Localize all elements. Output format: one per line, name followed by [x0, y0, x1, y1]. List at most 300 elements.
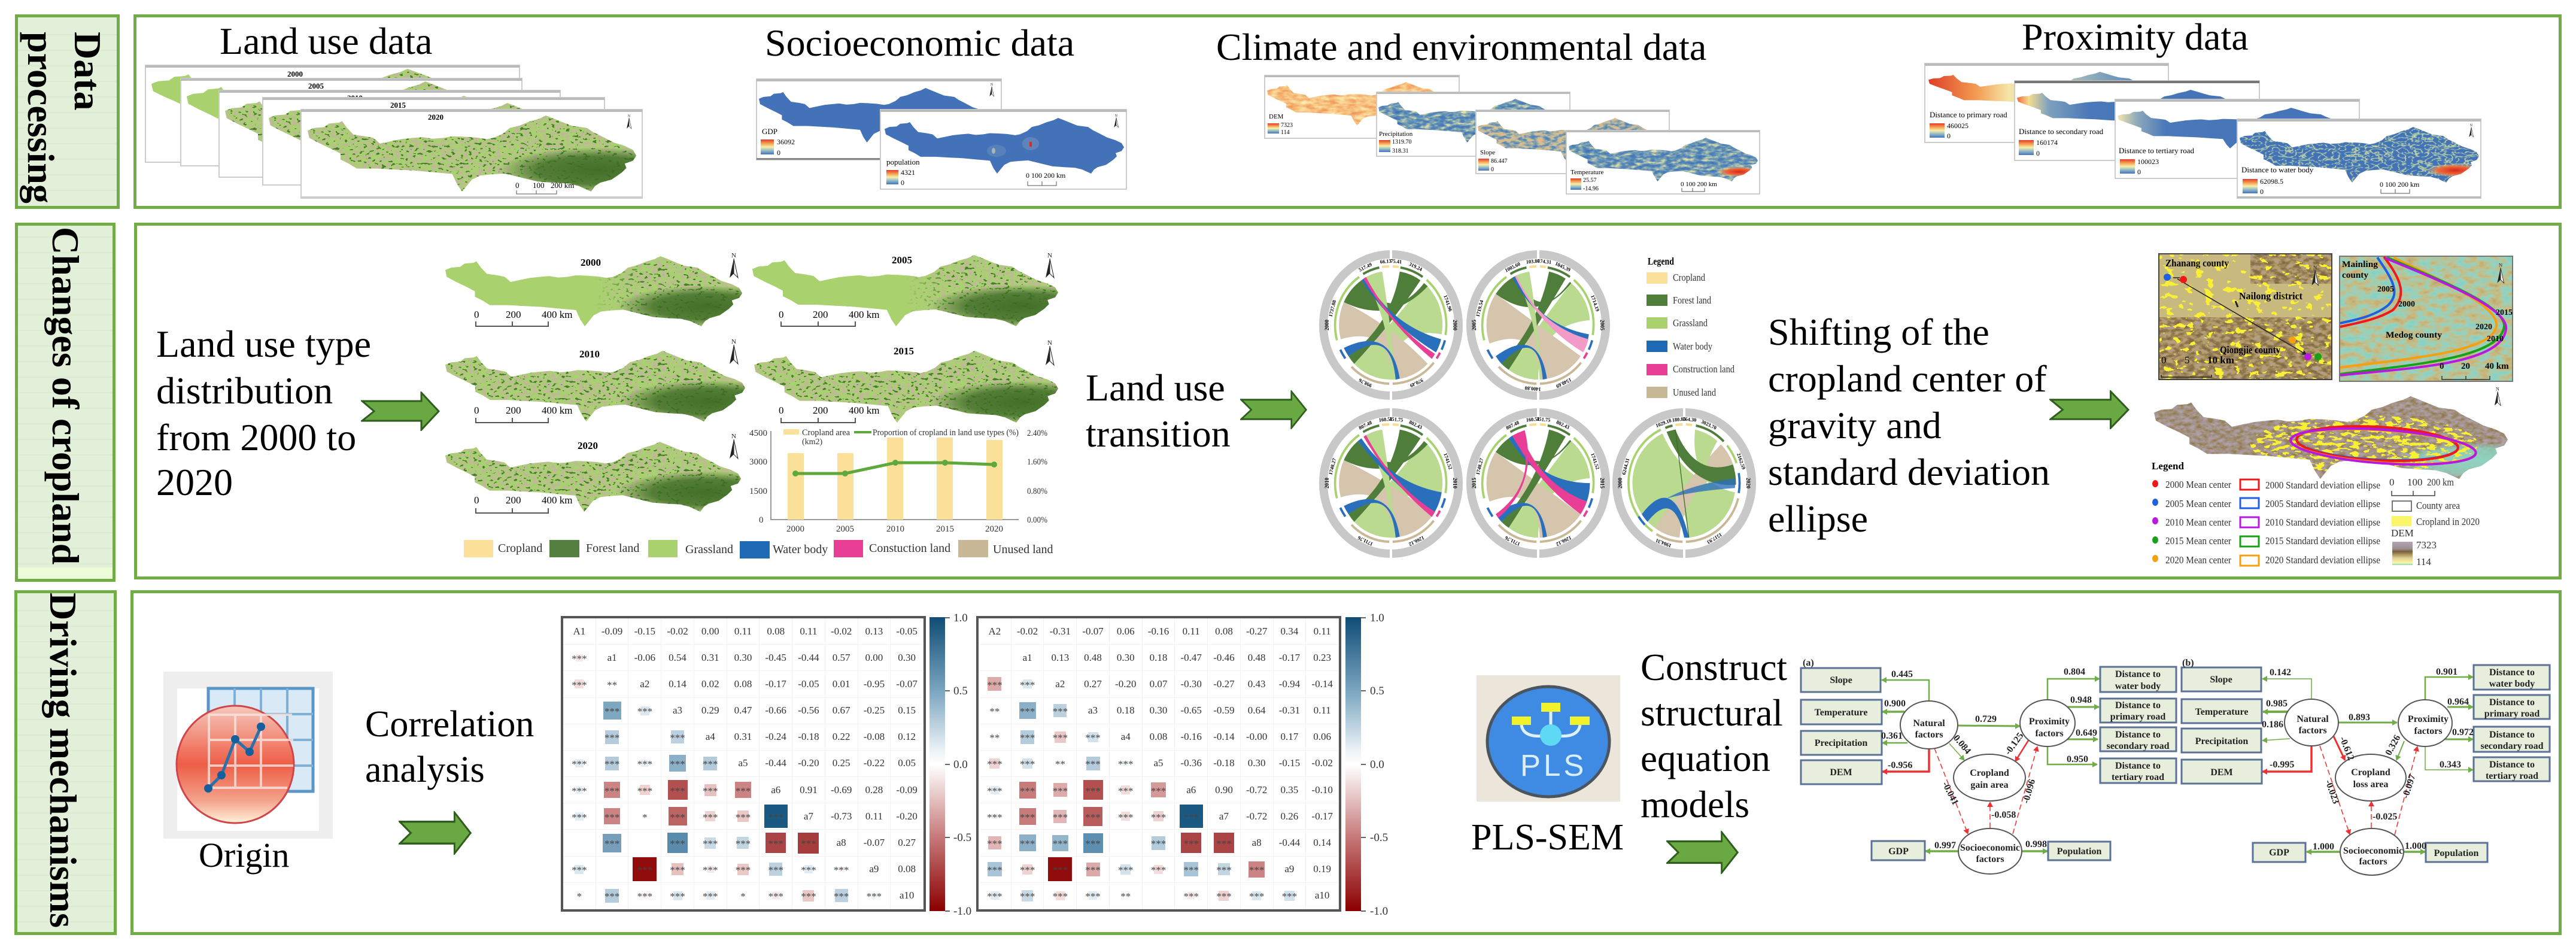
correlation matrix: A1: -0.73 — [831, 811, 852, 822]
structural equation model: cropland loss: (b) — [2182, 658, 2194, 668]
correlation matrix: A2: ** — [989, 706, 1000, 717]
chart: cropland area and proportion: 2010 — [886, 524, 904, 534]
text: correlation analysis: Correlation — [365, 704, 534, 745]
correlation matrix: A1: 0.01 — [833, 678, 850, 690]
map stack: climate and environmental data: DEM — [1269, 113, 1284, 120]
map: land use 2010: 400 km — [542, 405, 572, 416]
correlation matrix: A2: ** — [1055, 758, 1065, 770]
text: shifting of the cropland center of gravity: Shifting of the — [1768, 311, 1989, 353]
legend: land use classes: Grassland — [685, 543, 733, 556]
structural equation model: cropland loss: -0.023 — [2323, 779, 2341, 805]
structural equation model: cropland gain: Temperature — [1815, 708, 1867, 718]
structural equation model: cropland gain: Population — [2057, 846, 2101, 857]
structural equation model: cropland loss: loss area — [2353, 779, 2388, 790]
inset map: mean center shift: 0 — [2161, 354, 2167, 366]
correlation matrix: A2: -0.02 — [1017, 626, 1038, 637]
chord diagram: 2010-2015: 802.43 — [1408, 419, 1423, 430]
text: land use type distribution: from 2000 to — [156, 416, 356, 459]
chord diagram: 2000-2020: 2000 — [1617, 478, 1623, 488]
chord diagram: 2000-2020: 180.85 — [1672, 415, 1686, 423]
correlation matrix: A1: *** — [703, 812, 718, 823]
map: land use 2005: 400 km — [849, 309, 879, 320]
map stack: socioeconomic data: 36092 — [777, 138, 795, 146]
correlation matrix: A1: *** — [637, 864, 652, 876]
correlation matrix: A1: -0.45 — [765, 652, 786, 663]
correlation matrix: A1: *** — [670, 732, 685, 743]
icon: PLS software — [1477, 675, 1620, 802]
chord diagram: 2015-2020: 1711.76 — [1503, 535, 1521, 548]
correlation matrix: A2: *** — [987, 891, 1003, 902]
correlation matrix: A2: -0.31 — [1050, 626, 1071, 637]
structural equation model: cropland loss: Slope — [2210, 675, 2232, 685]
correlation matrix: A1: *** — [736, 785, 751, 797]
inset map: mean center shift: Qiongjie county — [2220, 344, 2280, 356]
map: land use 2000: 400 km — [542, 309, 572, 320]
map stack: proximity data: Distance to primary road — [1930, 110, 2007, 119]
correlation matrix: A2: *** — [1183, 864, 1199, 876]
correlation matrix: A1: *** — [572, 653, 587, 664]
legend: land use classes: Constuction land — [869, 542, 950, 555]
correlation matrix: A1: *** — [801, 891, 816, 902]
correlation matrix: A1: 0.12 — [898, 731, 916, 742]
legend: center and ellipse: Cropland in 2020 — [2416, 516, 2480, 527]
correlation matrix: A1: -0.05 — [798, 678, 819, 690]
correlation matrix: A1: *** — [834, 891, 849, 902]
map stack: land use data: 2005 — [308, 81, 324, 90]
correlation matrix: A2: -0.17 — [1311, 811, 1333, 822]
map: land use 2000: 200 — [506, 309, 521, 320]
heading: proximity data: Proximity data — [2022, 16, 2249, 58]
structural equation model: cropland gain: -0.041 — [1940, 780, 1960, 807]
structural equation model: cropland gain: 0.997 — [1934, 840, 1956, 851]
map: land use 2020 — [445, 433, 741, 513]
map stack: proximity data: 0 100 200 km — [2380, 180, 2420, 189]
inset map: mean center shift: 10 km — [2207, 354, 2234, 366]
correlation matrix: A2: 0.30 — [1117, 652, 1135, 663]
correlation matrix: A1: -0.22 — [864, 757, 885, 769]
correlation matrix: A1: a4 — [706, 731, 715, 742]
map: land use 2015: 400 km — [849, 405, 879, 416]
correlation matrix: A1: a2 — [640, 678, 649, 690]
correlation matrix: A2: -0.47 — [1180, 652, 1202, 663]
map: land use 2015: 0 — [779, 405, 784, 416]
chord diagram: 2015-2020: 2015 — [1471, 478, 1477, 488]
structural equation model: cropland loss: Population — [2434, 848, 2478, 858]
correlation matrix: A1: 0.25 — [833, 757, 850, 769]
chord diagram: 2010-2015: 1741.52 — [1442, 452, 1454, 471]
chord diagram: 2010-2015: 2010 — [1324, 478, 1330, 488]
heading: land use data: Land use data — [220, 20, 432, 62]
correlation matrix: A1: 0.00 — [701, 626, 719, 637]
text: land use type distribution: distribution — [156, 369, 333, 412]
correlation matrix: A1: *** — [768, 838, 783, 849]
structural equation model: cropland gain: 0.998 — [2025, 839, 2047, 849]
inset map: standard deviation ellipses: Mainling — [2342, 260, 2378, 269]
inset map: standard deviation ellipses: 2005 — [2377, 285, 2394, 294]
correlation matrix: A2: 0.64 — [1248, 705, 1266, 716]
correlation matrix: A1: ** — [607, 679, 617, 691]
correlation matrix: A1: -0.56 — [798, 705, 819, 716]
correlation matrix: A2: *** — [1249, 864, 1264, 876]
text: shifting of the cropland center of gravity: ellipse — [1768, 497, 1868, 540]
text: land use transition: Land use — [1086, 366, 1225, 409]
correlation matrix: A2: *** — [1020, 891, 1035, 902]
chord diagram: 2015-2020 — [1471, 407, 1606, 559]
chord diagram: 2010-2015: 1266.12 — [1408, 535, 1425, 548]
map stack: proximity data — [1925, 63, 2481, 198]
structural equation model: cropland gain: factors — [1976, 854, 2004, 864]
map stack: proximity data: Distance to tertiary road — [2119, 146, 2194, 155]
chord diagram: 2005-2010: 174.31 — [1538, 257, 1552, 265]
structural equation model: cropland loss: Precipitation — [2195, 736, 2248, 746]
correlation matrix: A1: -0.09 — [602, 626, 622, 637]
text: construct structural equation models: Construct — [1641, 646, 1787, 688]
legend: chord classes: Water body — [1673, 341, 1712, 352]
map: land use 2005: 200 — [813, 309, 828, 320]
correlation matrix: A1 — [561, 616, 926, 912]
correlation matrix: A1: *** — [670, 864, 685, 876]
correlation matrix: A1: *** — [703, 891, 718, 902]
structural equation model: cropland loss: DEM — [2210, 767, 2233, 778]
legend: center and ellipse: 2015 Standard deviation ellipse — [2265, 535, 2380, 547]
structural equation model: cropland gain: 0.649 — [2076, 728, 2097, 738]
correlation matrix: A2: *** — [1183, 812, 1199, 823]
correlation matrix: A2: -0.16 — [1180, 731, 1202, 742]
correlation matrix: A1: -0.09 — [896, 784, 918, 796]
inset map: standard deviation ellipses: Medog county — [2386, 330, 2443, 340]
colorbar: matrix A2: 0.0 — [1370, 758, 1384, 771]
chart: cropland area and proportion: (km2) — [802, 438, 823, 447]
correlation matrix: A2: *** — [1085, 812, 1101, 823]
structural equation model: cropland gain: tertiary road — [2112, 772, 2164, 782]
map stack: proximity data: 0 — [2260, 187, 2264, 196]
correlation matrix: A1: -0.02 — [667, 626, 688, 637]
chord diagram: 2010-2015: 1711.76 — [1356, 535, 1374, 548]
chord diagram: 2010-2015: 807.48 — [1358, 419, 1373, 431]
correlation matrix: A2: -0.65 — [1180, 705, 1202, 716]
map stack: land use data: 2015 — [390, 101, 406, 110]
correlation matrix: A1: a9 — [869, 863, 879, 875]
map stack: climate and environmental data: 1319.70 — [1392, 139, 1411, 145]
correlation matrix: A2: *** — [1085, 838, 1101, 849]
sidebar: driving mechanisms — [16, 591, 115, 934]
map: land use 2010: 0 — [474, 405, 479, 416]
chord diagram: 2000-2005: 319.24 — [1408, 261, 1423, 272]
chart: cropland area and proportion: 0.00% — [1027, 515, 1047, 525]
structural equation model: cropland gain: water body — [2115, 681, 2161, 691]
chart: cropland area and proportion: 1500 — [749, 487, 767, 496]
map: land use 2020: 400 km — [542, 494, 572, 506]
map: land use 2020: 200 — [506, 494, 521, 506]
legend: center and ellipse: Legend — [2152, 460, 2185, 472]
correlation matrix: A2: 0.26 — [1281, 811, 1298, 822]
structural equation model: cropland gain: Cropland — [1970, 768, 2009, 778]
structural equation model: cropland gain: 0.900 — [1884, 699, 1906, 709]
correlation matrix: A1: -0.02 — [831, 626, 852, 637]
map stack: proximity data: 62098.5 — [2260, 177, 2283, 186]
correlation matrix: A1: *** — [834, 864, 849, 876]
correlation matrix: A2: *** — [1053, 812, 1068, 823]
correlation matrix: A2: *** — [1216, 891, 1232, 902]
map stack: socioeconomic data — [757, 79, 1126, 189]
correlation matrix: A2: *** — [1020, 732, 1035, 743]
correlation matrix: A1: -0.24 — [765, 731, 786, 742]
panel: driving mechanisms — [132, 591, 2560, 934]
inset map: standard deviation ellipses: county — [2342, 271, 2369, 280]
structural equation model: cropland gain: GDP — [1888, 846, 1909, 857]
structural equation model: cropland gain: Slope — [1830, 675, 1852, 685]
text: shifting of the cropland center of gravity: standard deviation — [1768, 451, 2050, 493]
correlation matrix: A2: 0.11 — [1314, 626, 1331, 637]
structural equation model: cropland gain: 0.804 — [2064, 667, 2085, 677]
chord diagram: 2000-2020: 3023.70 — [1700, 418, 1718, 431]
structural equation model: cropland loss: 0.142 — [2270, 667, 2291, 678]
correlation matrix: A1: -0.25 — [864, 705, 885, 716]
correlation matrix: A1: -0.20 — [896, 811, 918, 822]
correlation matrix: A1: *** — [572, 679, 587, 691]
arrow — [400, 812, 470, 854]
correlation matrix: A2: *** — [1053, 838, 1068, 849]
chord diagram: 2015-2020: 1748.27 — [1475, 457, 1484, 475]
correlation matrix: A1: -0.18 — [798, 731, 819, 742]
correlation matrix: A2: *** — [1249, 891, 1264, 902]
chord diagram: 2000-2005: 517.49 — [1358, 261, 1373, 273]
legend: chord classes: Legend — [1648, 256, 1674, 267]
structural equation model: cropland loss: 0.964 — [2447, 697, 2469, 707]
chart: cropland area and proportion: 4500 — [749, 429, 767, 438]
structural equation model: cropland loss — [2182, 658, 2550, 875]
correlation matrix: A2: *** — [1183, 891, 1199, 902]
correlation matrix: A1: 0.14 — [669, 678, 686, 690]
chart: cropland area and proportion: 2000 — [786, 524, 804, 534]
correlation matrix: A1: *** — [867, 891, 882, 902]
correlation matrix: A1: 0.31 — [701, 652, 719, 663]
map stack: climate and environmental data: 86.447 — [1491, 158, 1507, 165]
correlation matrix: A1: 0.00 — [865, 652, 883, 663]
correlation matrix: A2: *** — [1020, 864, 1035, 876]
map stack: proximity data: 100023 — [2137, 157, 2159, 166]
chord diagram: 2015-2020: 160.51 — [1526, 415, 1540, 423]
map stack: climate and environmental data: 7323 — [1281, 122, 1293, 129]
correlation matrix: A2: *** — [987, 812, 1003, 823]
correlation matrix: A1: *** — [801, 864, 816, 876]
correlation matrix: A2: 0.48 — [1084, 652, 1102, 663]
structural equation model: cropland gain: (a) — [1803, 658, 1814, 668]
map: land use 2010: 200 — [506, 405, 521, 416]
correlation matrix: A2: *** — [1020, 706, 1035, 717]
legend: chord classes: Forest land — [1673, 295, 1711, 306]
correlation matrix: A1: * — [740, 891, 746, 902]
legend: center and ellipse: 2000 Standard deviation ellipse — [2265, 479, 2380, 491]
structural equation model: cropland gain: -0.956 — [1888, 760, 1912, 770]
correlation matrix: A1: A1 — [573, 626, 585, 637]
correlation matrix: A1: *** — [572, 864, 587, 876]
correlation matrix: A2 — [976, 616, 1341, 912]
structural equation model: cropland loss: -0.025 — [2373, 812, 2397, 822]
correlation matrix: A1: 0.30 — [734, 652, 752, 663]
sidebar: data processing: Data — [66, 32, 109, 111]
chord diagram: 2000-2005: 970.49 — [1409, 377, 1424, 389]
chord diagram: 2005-2010: 1400.80 — [1524, 385, 1541, 393]
legend: center and ellipse: 2005 Mean center — [2165, 498, 2231, 509]
structural equation model: cropland loss: Natural — [2296, 714, 2329, 724]
correlation matrix: A2: 0.48 — [1248, 652, 1266, 663]
correlation matrix: A2: 0.06 — [1117, 626, 1135, 637]
structural equation model: cropland loss: Temperature — [2195, 707, 2248, 717]
chord diagram: 2000-2020: 2162.59 — [1736, 452, 1747, 471]
chord diagram: 2000-2020 — [1617, 407, 1752, 559]
correlation matrix: A1: *** — [736, 864, 751, 876]
correlation matrix: A2: -0.10 — [1311, 784, 1333, 796]
correlation matrix: A1: a1 — [607, 652, 617, 663]
legend: chord classes: Unused land — [1673, 387, 1716, 398]
correlation matrix: A1: 0.47 — [734, 705, 752, 716]
correlation matrix: A2: -0.00 — [1246, 731, 1267, 742]
legend: center and ellipse: 0 — [2389, 476, 2394, 488]
correlation matrix: A1: 0.08 — [734, 678, 752, 690]
legend: center and ellipse: 114 — [2416, 556, 2431, 567]
chart: cropland area and proportion: Proportion of cropland in land use types (%) — [873, 428, 1019, 438]
correlation matrix: A2: 0.90 — [1215, 784, 1233, 796]
map stack: climate and environmental data: Temperature — [1570, 169, 1604, 176]
chord diagram: 2000-2020: 1904.31 — [1655, 538, 1672, 549]
correlation matrix: A2: 0.30 — [1150, 705, 1167, 716]
correlation matrix: A1: *** — [637, 758, 652, 770]
arrow — [1667, 832, 1737, 873]
structural equation model: cropland loss: 0.985 — [2266, 699, 2288, 709]
correlation matrix: A1: *** — [703, 838, 718, 849]
colorbar: matrix A1: 1.0 — [953, 612, 968, 624]
chord diagram: 2015-2020: 151.75 — [1536, 415, 1551, 423]
chord diagram: 2005-2010: 103.80 — [1526, 257, 1540, 265]
correlation matrix: A2: -0.18 — [1213, 757, 1235, 769]
structural equation model: cropland loss: factors — [2298, 726, 2327, 736]
correlation matrix: A1: a3 — [673, 705, 682, 716]
structural equation model: cropland loss: 0.901 — [2436, 667, 2457, 677]
map: land use 2005 — [752, 252, 1058, 326]
chord diagram: 2000-2020: 1029.18 — [1655, 417, 1672, 429]
correlation matrix: A1: 0.08 — [898, 863, 916, 875]
correlation matrix: A1: *** — [736, 838, 751, 849]
correlation matrix: A2: -0.72 — [1246, 784, 1267, 796]
structural equation model: cropland loss: Distance to — [2489, 697, 2535, 708]
arrow — [2051, 391, 2128, 428]
correlation matrix: A1: 0.08 — [767, 626, 785, 637]
map stack: climate and environmental data — [1265, 75, 1760, 194]
correlation matrix: A2: a1 — [1023, 652, 1032, 663]
correlation matrix: A2: *** — [1085, 864, 1101, 876]
map: land use 2000: 0 — [474, 309, 479, 320]
correlation matrix: A1: *** — [703, 864, 718, 876]
structural equation model: cropland gain: factors — [1915, 730, 1943, 740]
legend: land use classes: Cropland — [498, 542, 542, 555]
structural equation model: cropland gain: factors — [2035, 729, 2064, 739]
colorbar: matrix A1: 0.0 — [953, 758, 968, 771]
correlation matrix: A2: *** — [1151, 838, 1166, 849]
correlation matrix: A1: -0.15 — [634, 626, 655, 637]
correlation matrix: A1: 0.28 — [865, 784, 883, 796]
correlation matrix: A2: *** — [1118, 864, 1134, 876]
correlation matrix: A1: -0.44 — [798, 652, 819, 663]
correlation matrix: A1: -0.20 — [798, 757, 819, 769]
correlation matrix: A1: *** — [670, 891, 685, 902]
map stack: climate and environmental data: 318.31 — [1392, 148, 1409, 154]
correlation matrix: A2: *** — [1053, 891, 1068, 902]
structural equation model: cropland loss: factors — [2359, 857, 2387, 867]
structural equation model: cropland loss: Socioeconomic — [2343, 846, 2403, 856]
correlation matrix: A1: *** — [703, 758, 718, 770]
correlation matrix: A2: 0.13 — [1051, 652, 1069, 663]
legend: land use classes: Forest land — [586, 542, 639, 555]
correlation matrix: A1: 0.13 — [865, 626, 883, 637]
text: land use type distribution: 2020 — [156, 461, 233, 503]
correlation matrix: A2: -0.02 — [1311, 757, 1333, 769]
map stack: land use data: 2020 — [428, 113, 443, 122]
map stack: climate and environmental data: -14.96 — [1583, 186, 1599, 192]
legend: center and ellipse: 2015 Mean center — [2165, 535, 2231, 547]
correlation matrix: A2: 0.11 — [1314, 705, 1331, 716]
colorbar: matrix A1: -0.5 — [953, 831, 971, 844]
text: shifting of the cropland center of gravity: gravity and — [1768, 404, 1942, 447]
chart: cropland area and proportion — [749, 428, 1047, 534]
chord diagram: 2005-2010: 1540.69 — [1556, 377, 1572, 390]
heading: climate and environmental data: Climate and environmental data — [1216, 26, 1706, 68]
correlation matrix: A1: 0.54 — [669, 652, 686, 663]
structural equation model: cropland loss: Proximity — [2408, 714, 2449, 724]
map stack: climate and environmental data: Slope — [1480, 149, 1495, 156]
correlation matrix: A2: 0.19 — [1313, 863, 1331, 875]
map: land use 2015: 200 — [813, 405, 828, 416]
correlation matrix: A1: a7 — [804, 811, 813, 822]
correlation matrix: A2: *** — [1151, 864, 1166, 876]
text: construct structural equation models: models — [1641, 784, 1749, 825]
correlation matrix: A2: -0.44 — [1279, 837, 1300, 848]
map stack: climate and environmental data: 0 — [1491, 166, 1494, 173]
chord diagram: 2000-2005: 998.76 — [1357, 377, 1373, 389]
map stack: climate and environmental data: Precipitation — [1379, 130, 1413, 138]
correlation matrix: A2: *** — [1085, 785, 1101, 797]
correlation matrix: A1: -0.08 — [864, 731, 885, 742]
correlation matrix: A2: -0.14 — [1213, 731, 1235, 742]
structural equation model: cropland loss: GDP — [2269, 848, 2289, 858]
text: shifting of the cropland center of gravity: cropland center of — [1768, 357, 2047, 400]
structural equation model: cropland gain: Distance to — [2115, 669, 2161, 679]
chord diagram: 2005-2010: 1045.39 — [1554, 260, 1572, 273]
correlation matrix: A2: *** — [1183, 838, 1199, 849]
correlation matrix: A1: *** — [604, 838, 619, 849]
inset map: standard deviation ellipses: 2010 — [2487, 335, 2504, 344]
correlation matrix: A2: 0.17 — [1281, 731, 1298, 742]
correlation matrix: A2: *** — [1053, 706, 1068, 717]
chord diagram: 2010-2015 — [1323, 407, 1459, 559]
correlation matrix: A2: a5 — [1153, 757, 1164, 769]
correlation matrix: A1: *** — [670, 812, 685, 823]
correlation matrix: A1: a8 — [837, 837, 846, 848]
correlation matrix: A2: *** — [1085, 891, 1101, 902]
panel: changes of cropland — [135, 224, 2560, 578]
correlation matrix: A2: A2 — [988, 626, 1001, 637]
sidebar: data processing — [17, 16, 119, 207]
chord diagram: 2010-2015: 1748.27 — [1328, 457, 1337, 475]
text: land use type distribution: Land use type — [156, 323, 371, 365]
legend: center and ellipse: 7323 — [2416, 539, 2437, 551]
legend: center and ellipse: 2020 Mean center — [2165, 554, 2231, 566]
correlation matrix: A2: *** — [1020, 758, 1035, 770]
structural equation model: cropland loss: 1.000 — [2405, 841, 2426, 851]
map stack: land use data: 100 — [533, 181, 545, 190]
correlation matrix: A2: 0.43 — [1248, 678, 1266, 690]
map stack: proximity data: Distance to secondary road — [2019, 127, 2104, 136]
